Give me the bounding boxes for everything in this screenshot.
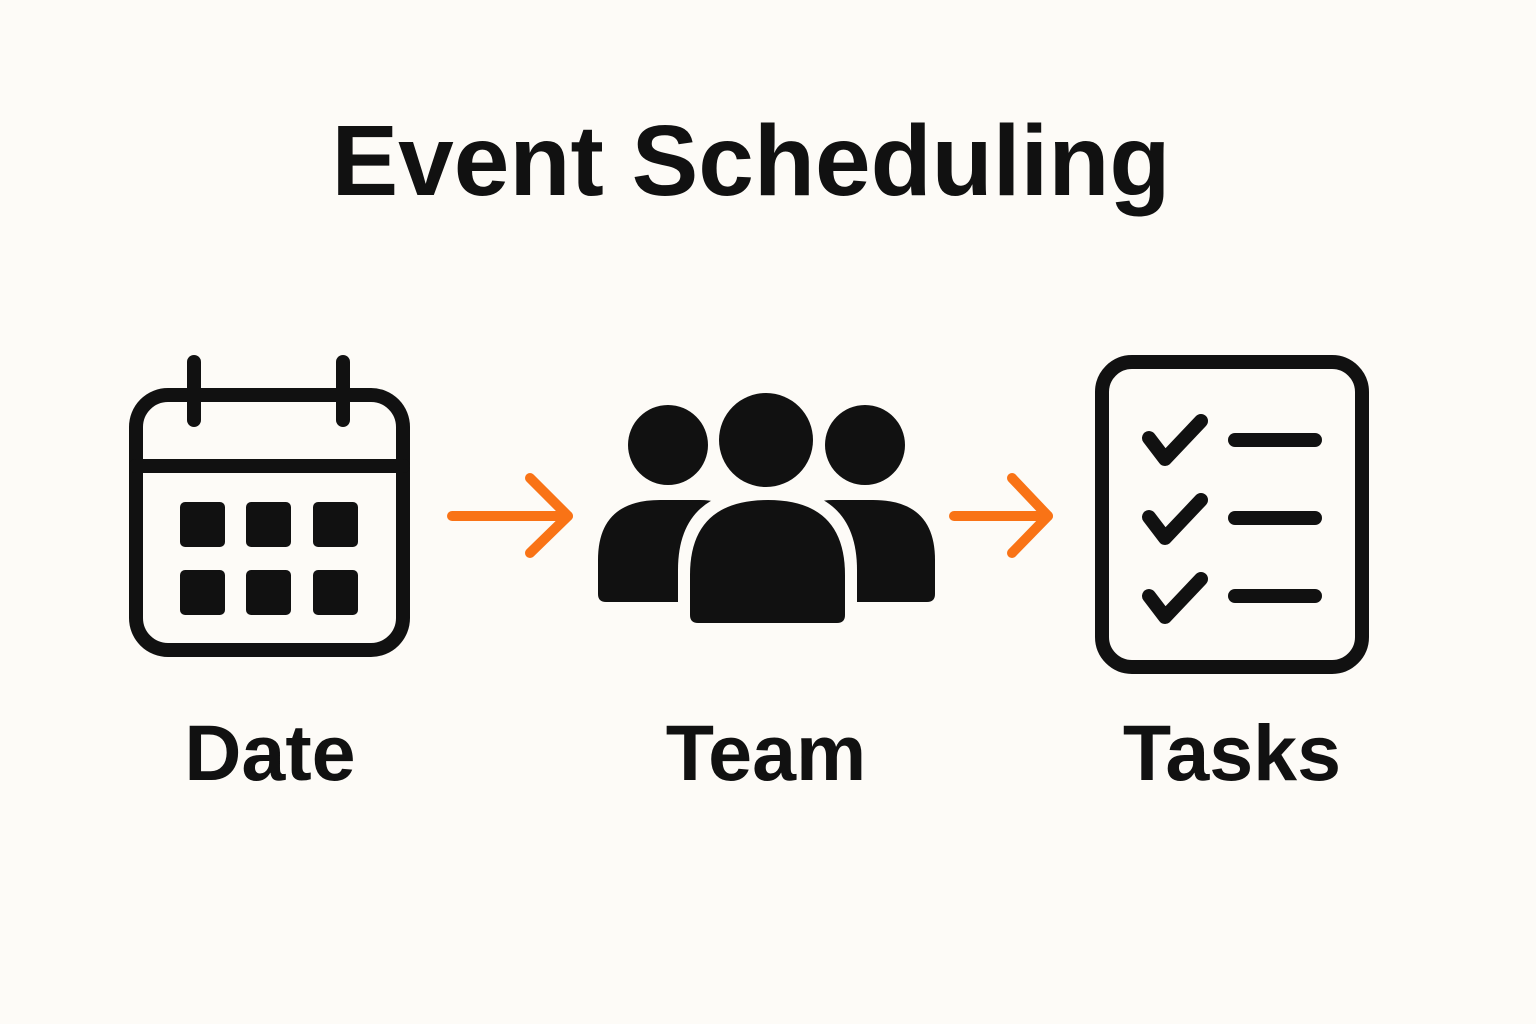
label: Tasks: Tasks — [1123, 708, 1341, 797]
arrow: team to tasks — [954, 478, 1048, 553]
arrow: date to team — [452, 478, 568, 553]
title: Event Scheduling — [331, 105, 1171, 217]
icon: task list — [1102, 362, 1362, 667]
label: Date: Date — [184, 708, 356, 797]
icon: calendar — [136, 362, 403, 650]
icon: team — [598, 385, 935, 630]
label: Team: Team — [666, 708, 866, 797]
